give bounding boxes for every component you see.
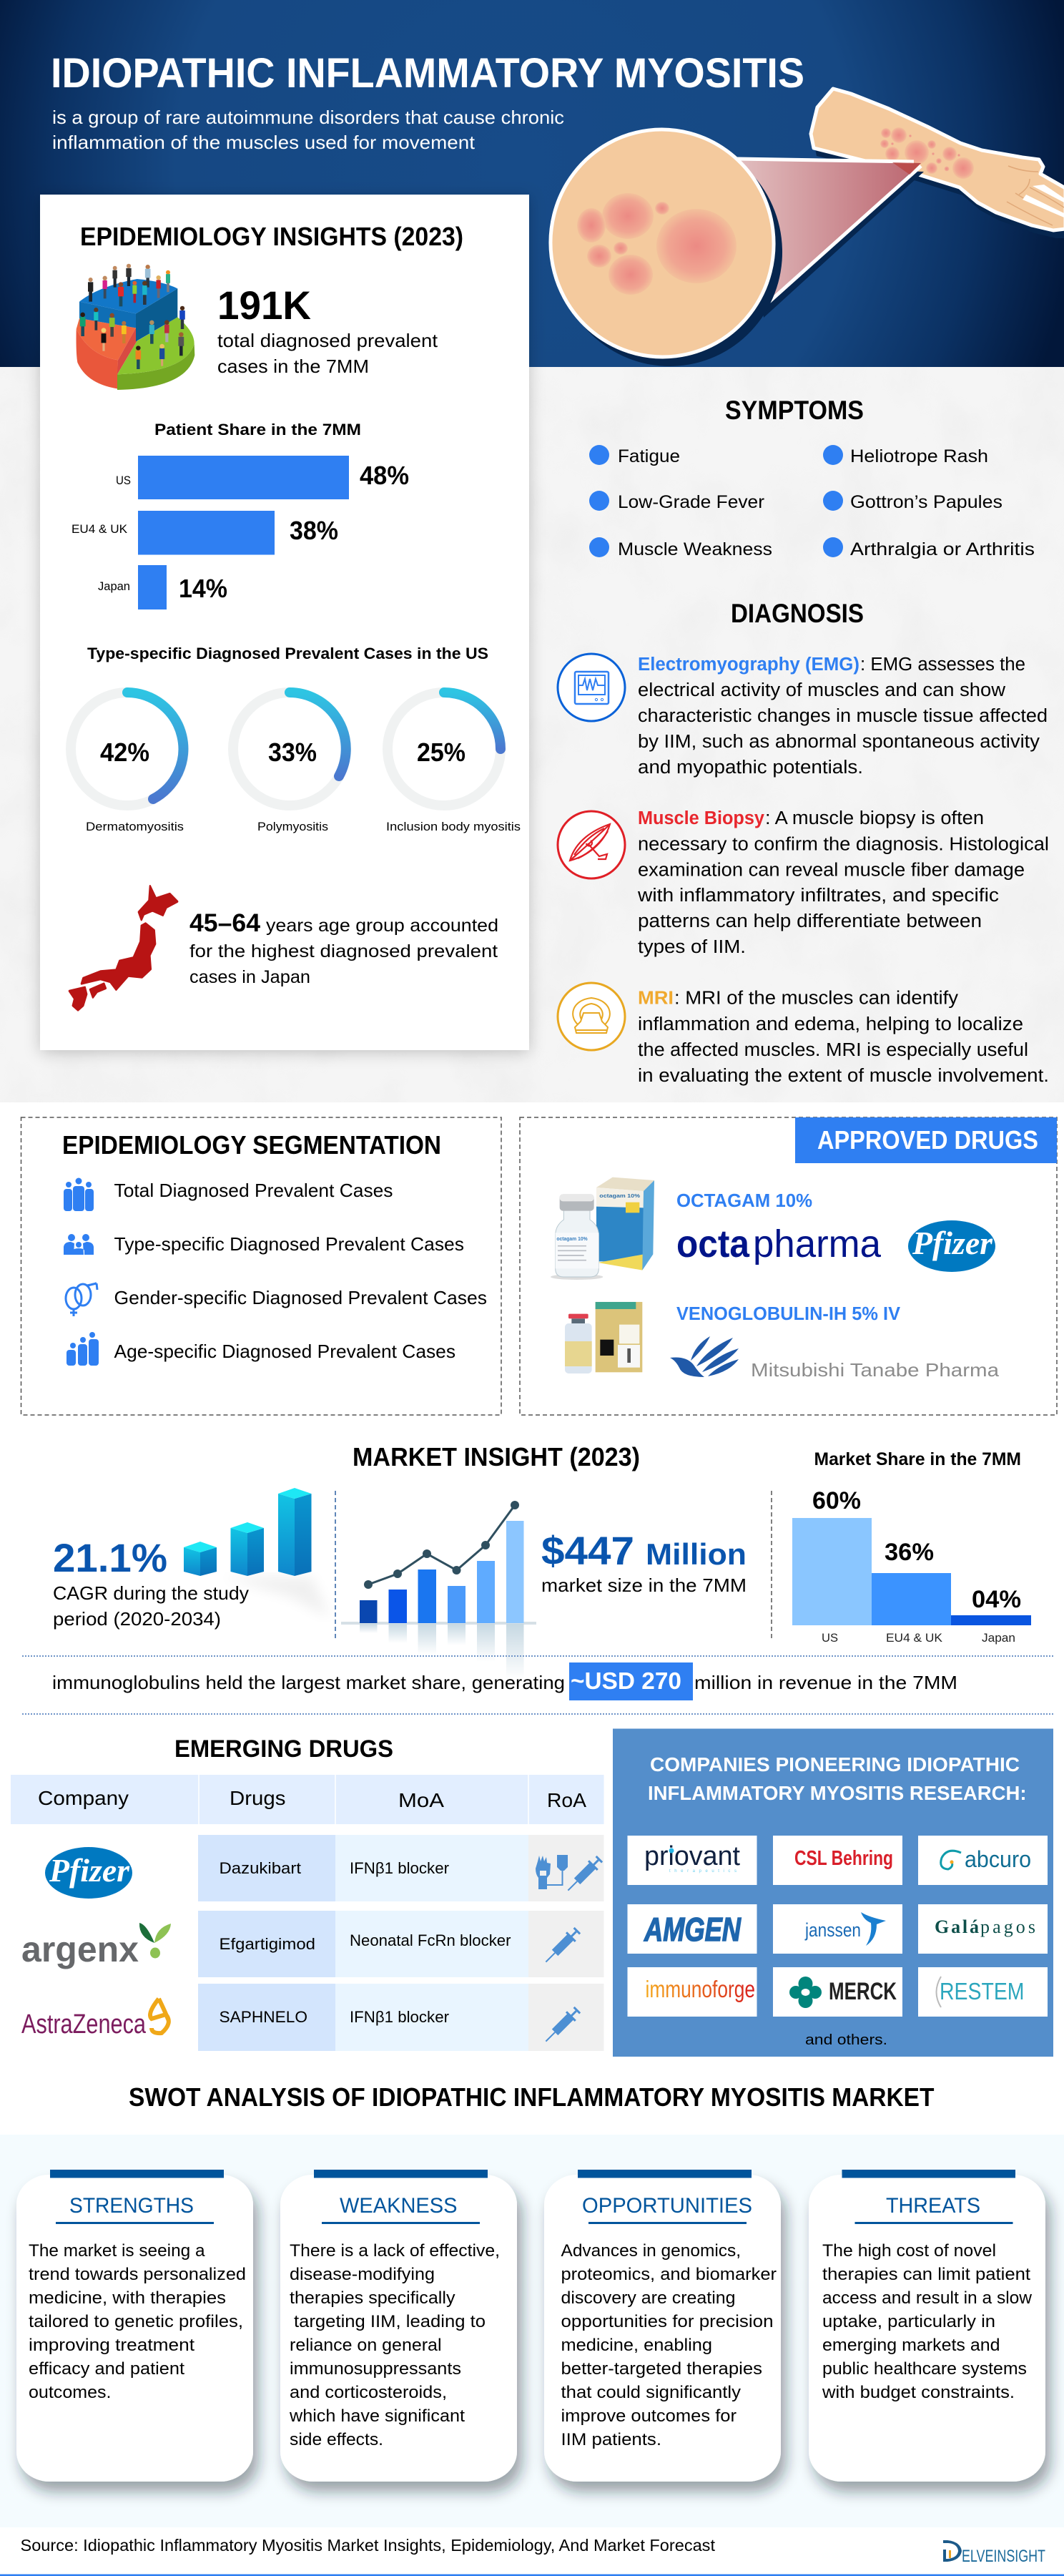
heading: diagnosis: DIAGNOSIS — [731, 599, 864, 628]
stat: market size — [541, 1528, 747, 1596]
symptom list: Fatigue — [618, 446, 680, 466]
row: astrazeneca saphnelo — [21, 1984, 604, 2051]
row: pfizer dazukibart: Dazukibart — [219, 1859, 301, 1877]
text: MRI — [638, 989, 1049, 1086]
text: EMG: characteristic changes in muscle tissue affected — [638, 706, 1048, 726]
logo: priovant: therapeutics — [669, 1869, 738, 1874]
image: venoglobulin vial and box — [565, 1302, 642, 1373]
text: EMG — [638, 655, 1048, 778]
chart: market share in the 7MM: 04% — [972, 1586, 1021, 1613]
text: age-specific cases: Age-specific Diagnosed Prevalent Cases — [114, 1341, 455, 1362]
text: EMG: Electromyography (EMG) — [638, 655, 859, 675]
card: opportunities — [544, 2170, 781, 2482]
logo: merck: MERCK — [829, 1978, 897, 2005]
panel: market CAGR — [53, 1488, 330, 1630]
text: weakness — [289, 2241, 500, 2449]
chart: market share in the 7MM: Japan — [982, 1631, 1015, 1645]
panel: symptoms — [589, 396, 1035, 559]
marble background — [0, 367, 1064, 1102]
donut chart: polymyositis — [233, 692, 346, 833]
logo: janssen: janssen — [804, 1919, 861, 1941]
text: opportunities: medicine, enabling — [561, 2336, 712, 2355]
icon: 3D growth columns — [184, 1488, 330, 1618]
row: pfizer dazukibart: IFNβ1 blocker — [350, 1859, 449, 1877]
row: argenx efgartigimod: Efgartigimod — [219, 1935, 315, 1953]
skin rash spots — [577, 193, 737, 295]
arm — [811, 89, 1064, 230]
text: strengths: improving treatment — [29, 2336, 194, 2355]
text: weakness: reliance on general — [290, 2336, 442, 2355]
logo: priovant: priovant — [644, 1841, 740, 1871]
stat: CAGR: 21.1% — [53, 1535, 167, 1580]
magnifying cone — [737, 159, 921, 315]
callout: japan age group: for the highest diagnosed prevalent — [189, 941, 498, 961]
bottom bar — [0, 2574, 1064, 2576]
row: argenx efgartigimod — [21, 1911, 604, 1977]
arm rash spots — [880, 127, 974, 179]
cone shadow — [744, 166, 924, 318]
table: emerging drugs — [11, 1773, 604, 2051]
chart: market share in the 7MM: 60% — [812, 1487, 861, 1514]
callout: immunoglobulins revenue: immunoglobulins held the largest market share, generating — [52, 1672, 565, 1693]
donut chart: inclusion body myositis: 25% — [417, 738, 466, 767]
icon: gender symbols — [66, 1283, 97, 1316]
text: threats — [822, 2241, 1033, 2402]
label: octagam: OCTAGAM 10% — [676, 1190, 812, 1211]
icon: total cases — [64, 1177, 94, 1211]
logo: pfizer — [908, 1220, 995, 1272]
heading: emerging drugs: EMERGING DRUGS — [174, 1735, 393, 1763]
icon: infusion drip — [536, 1855, 568, 1889]
subtitle: inflammation of the muscles used for movement — [52, 132, 476, 153]
row: pfizer dazukibart — [45, 1835, 604, 1901]
logo: abcuro: abcuro — [965, 1846, 1031, 1872]
icon: electromyography monitor — [558, 654, 625, 721]
heading: approved drugs — [795, 1117, 1057, 1163]
callout: japan age group — [189, 909, 498, 987]
SWOT background — [0, 2135, 1064, 2527]
chart: market size bars and trend line — [341, 1501, 536, 1679]
row: astrazeneca saphnelo: SAPHNELO — [219, 2008, 307, 2026]
logo: amgen: AMGEN — [644, 1911, 742, 1948]
callout: immunoglobulins revenue: ~USD 270 — [571, 1667, 681, 1694]
logo: galapagos: Galá — [935, 1916, 979, 1937]
heading: epidemiology segmentation: EPIDEMIOLOGY SEGMENTATION — [62, 1130, 441, 1160]
heading: patient share: Patient Share in the 7MM — [154, 421, 361, 439]
stat: CAGR: CAGR during the study — [53, 1582, 249, 1604]
text: threats: with budget constraints. — [822, 2383, 1015, 2402]
card: threats — [809, 2170, 1045, 2482]
text: opportunities: better-targeted therapies — [561, 2359, 762, 2379]
text: muscle biopsy: examination can reveal muscle fiber damage — [638, 860, 1025, 880]
text: threats: access and result in a slow — [822, 2288, 1033, 2308]
logo: restem: RESTEM — [940, 1978, 1024, 2004]
icon: muscle biopsy — [558, 811, 625, 878]
bullets — [589, 445, 843, 557]
text: muscle biopsy: Muscle Biopsy — [638, 808, 765, 828]
card: weakness: WEAKNESS — [340, 2194, 458, 2218]
text: gender-specific cases: Gender-specific Diagnosed Prevalent Cases — [114, 1287, 487, 1308]
text: weakness: disease-modifying — [290, 2265, 435, 2284]
stat: 191K: cases in the 7MM — [217, 356, 369, 377]
stat: market size: market size in the 7MM — [541, 1575, 747, 1596]
text: strengths: medicine, with therapies — [29, 2288, 226, 2308]
text: muscle biopsy: necessary to confirm the diagnosis. Histological — [638, 834, 1049, 854]
text: weakness: immunosuppressants — [290, 2359, 461, 2379]
header background — [0, 0, 1064, 368]
symptom list: Gottron’s Papules — [850, 492, 1003, 512]
label: venoglobulin: VENOGLOBULIN-IH 5% IV — [676, 1303, 901, 1324]
text: opportunities: discovery are creating — [561, 2288, 735, 2308]
row: argenx efgartigimod: argenx — [21, 1929, 139, 1969]
text: weakness: which have significant — [289, 2406, 465, 2426]
donut chart: dermatomyositis: Dermatomyositis — [86, 820, 184, 833]
panel: diagnosis — [558, 599, 1049, 1086]
table header: RoA — [547, 1789, 586, 1811]
card: threats: THREATS — [886, 2194, 980, 2218]
logo: janssen — [804, 1912, 886, 1946]
stat: CAGR: period (2020-2034) — [53, 1608, 221, 1630]
text: opportunities — [561, 2241, 777, 2449]
image: octagam vial and box: octagam 10% — [599, 1192, 641, 1199]
text: threats: public healthcare systems — [822, 2359, 1027, 2379]
bar chart: patient share: Japan — [98, 579, 130, 593]
text: strengths: efficacy and patient — [29, 2359, 184, 2379]
text: muscle biopsy — [637, 808, 1049, 957]
callout: immunoglobulins revenue: million in revenue in the 7MM — [694, 1672, 957, 1693]
heading: symptoms: SYMPTOMS — [725, 396, 864, 425]
icon: syringe — [541, 2005, 582, 2046]
icon: syringe — [563, 1854, 604, 1895]
subtitle — [52, 107, 564, 153]
text: weakness: side effects. — [290, 2430, 383, 2449]
text: threats: emerging markets and — [822, 2336, 1000, 2355]
table header: Company — [38, 1787, 129, 1809]
stat: CAGR — [53, 1535, 249, 1630]
donut chart: inclusion body myositis: Inclusion body myositis — [386, 820, 521, 833]
text: total cases: Total Diagnosed Prevalent Cases — [114, 1180, 393, 1201]
logo grid — [628, 1836, 1048, 2017]
stat: market size: Million — [646, 1537, 747, 1571]
heading: market insight: MARKET INSIGHT (2023) — [353, 1442, 640, 1471]
callout: japan age group: 45–64 — [189, 909, 261, 937]
panel: companies pioneering research — [613, 1728, 1053, 2057]
chart: market share in the 7MM: 36% — [885, 1539, 934, 1566]
stat: 191K — [217, 283, 438, 377]
illustration: arm with magnified skin rash — [538, 89, 1064, 379]
text: threats: The high cost of novel — [822, 2241, 996, 2261]
callout: japan age group: years age group accounted — [266, 916, 498, 936]
donut chart: dermatomyositis — [71, 692, 184, 833]
text: weakness: therapies specifically — [290, 2288, 455, 2308]
text: EMG: electrical activity of muscles and can show — [638, 680, 1006, 700]
icon: people on pie chart — [77, 264, 194, 390]
bar chart: patient share: 38% — [290, 516, 338, 545]
bar chart: patient share: 14% — [179, 574, 227, 603]
card: opportunities: OPPORTUNITIES — [582, 2194, 752, 2218]
stat: market size: $447 — [541, 1528, 634, 1573]
text: type-specific cases: Type-specific Diagnosed Prevalent Cases — [114, 1233, 464, 1255]
image: octagam vial and box — [551, 1177, 654, 1280]
callout: japan age group: cases in Japan — [189, 967, 310, 987]
text: MRI: in evaluating the extent of muscle involvement. — [638, 1066, 1049, 1086]
logo: CSL Behring: CSL Behring — [794, 1847, 893, 1870]
source line: Source: Idiopathic Inflammatory Myositis Market Insights, Epidemiology, And Market Forecast — [20, 2536, 716, 2555]
text: EMG: and myopathic potentials. — [638, 758, 863, 778]
stat: 191K: total diagnosed prevalent — [217, 330, 438, 351]
text: strengths: trend towards personalized — [29, 2265, 246, 2284]
logo: octapharma — [676, 1223, 882, 1265]
logo: mitsubishi tanabe pharma — [670, 1336, 1000, 1381]
text: strengths: tailored to genetic profiles, — [29, 2312, 243, 2331]
bar chart: patient share: 48% — [360, 461, 409, 490]
logo: galapagos: pagos — [980, 1916, 1035, 1937]
text: threats: therapies can limit patient — [822, 2265, 1030, 2284]
icon: type-specific cases — [64, 1234, 94, 1255]
heading: approved drugs: APPROVED DRUGS — [817, 1125, 1038, 1155]
text: weakness: There is a lack of effective, — [290, 2241, 500, 2261]
panel: approved drugs — [520, 1117, 1057, 1415]
card: strengths: STRENGTHS — [69, 2194, 194, 2218]
logo: pfizer: Pfizer — [912, 1225, 993, 1261]
heading: companies: COMPANIES PIONEERING IDIOPATHIC — [650, 1753, 1020, 1776]
logo: immunoforge: immunoforge — [645, 1976, 755, 2002]
row: pfizer dazukibart: Pfizer — [49, 1852, 130, 1889]
logo: merck — [789, 1977, 897, 2008]
text: MRI: : MRI of the muscles can identify — [674, 989, 958, 1009]
text: MRI: inflammation and edema, helping to localize — [638, 1014, 1023, 1034]
arm shadow — [814, 97, 1064, 238]
symptom list: Low-Grade Fever — [618, 492, 764, 512]
text: EMG: by IIM, such as abnormal spontaneous activity — [638, 732, 1040, 752]
logo: octapharma: pharma — [753, 1223, 882, 1265]
text: threats: uptake, particularly in — [822, 2312, 995, 2331]
text: opportunities: improve outcomes for — [561, 2406, 737, 2426]
table header: MoA — [398, 1789, 444, 1811]
panel: epidemiology insights — [40, 195, 529, 1050]
text: weakness: and corticosteroids, — [290, 2383, 447, 2402]
row: astrazeneca saphnelo: IFNβ1 blocker — [350, 2008, 449, 2026]
icon: syringe — [541, 1926, 582, 1967]
callout: immunoglobulins revenue — [52, 1662, 957, 1700]
donut chart: polymyositis: Polymyositis — [257, 820, 328, 833]
text: strengths — [29, 2241, 246, 2402]
text: MRI: MRI — [638, 989, 674, 1009]
heading: companies — [648, 1753, 1027, 1804]
magnified skin circle shadow — [543, 124, 795, 379]
symptom list: Muscle Weakness — [618, 539, 772, 559]
table header: Drugs — [230, 1787, 286, 1809]
text: muscle biopsy: : A muscle biopsy is often — [765, 808, 984, 828]
icon: japan map — [69, 886, 177, 1010]
chart: market share in the 7MM — [792, 1449, 1031, 1645]
title: IDIOPATHIC INFLAMMATORY MYOSITIS — [51, 50, 804, 97]
heading: epidemiology insights: EPIDEMIOLOGY INSIGHTS (2023) — [80, 222, 463, 251]
donut chart: dermatomyositis: 42% — [100, 738, 149, 767]
text: MRI: the affected muscles. MRI is especially useful — [638, 1040, 1028, 1060]
card: weakness — [280, 2170, 517, 2482]
symptom list — [618, 446, 1035, 559]
text: opportunities: Advances in genomics, — [561, 2241, 741, 2261]
donut chart: polymyositis: 33% — [268, 738, 317, 767]
chart: market share in the 7MM: EU4 & UK — [886, 1631, 943, 1645]
text: muscle biopsy: patterns can help differentiate between — [638, 911, 982, 931]
row: astrazeneca saphnelo: AstraZeneca — [21, 2009, 147, 2039]
logo: octapharma: octa — [676, 1223, 750, 1265]
text: opportunities: proteomics, and biomarker — [561, 2265, 777, 2284]
text: opportunities: opportunities for precision — [561, 2312, 774, 2331]
text: opportunities: that could significantly — [561, 2383, 741, 2402]
text: EMG: : EMG assesses the — [860, 655, 1025, 675]
table header — [11, 1773, 604, 1824]
magnified skin circle — [538, 117, 787, 370]
symptom list: Heliotrope Rash — [850, 446, 988, 466]
image: octagam vial and box: octagam 10% — [556, 1235, 588, 1242]
panel: epidemiology segmentation — [21, 1117, 501, 1415]
tile backgrounds — [628, 1836, 1048, 2017]
bar chart: patient share: EU4 & UK — [72, 522, 128, 536]
symptom list: Arthralgia or Arthritis — [850, 539, 1035, 559]
text: strengths: The market is seeing a — [29, 2241, 205, 2261]
text: muscle biopsy: with inflammatory infiltrates, and specific — [637, 886, 999, 906]
heading: SWOT analysis: SWOT ANALYSIS OF IDIOPATHIC INFLAMMATORY MYOSITIS MARKET — [129, 2082, 934, 2112]
donut chart: inclusion body myositis — [386, 692, 521, 833]
text: strengths: outcomes. — [29, 2383, 112, 2402]
text: opportunities: IIM patients. — [561, 2430, 661, 2449]
heading: companies: INFLAMMATORY MYOSITIS RESEARCH: — [648, 1782, 1027, 1804]
bar chart: patient share: US — [116, 474, 131, 487]
text: muscle biopsy: types of IIM. — [638, 937, 746, 957]
text: weakness: targeting IIM, leading to — [294, 2312, 486, 2331]
heading: type-specific cases: Type-specific Diagnosed Prevalent Cases in the US — [87, 645, 488, 662]
logo: galapagos — [935, 1916, 1035, 1937]
logo: mitsubishi tanabe pharma: Mitsubishi Tanabe Pharma — [751, 1359, 1000, 1381]
heading: market share: Market Share in the 7MM — [814, 1449, 1021, 1469]
icon: MRI scanner — [558, 983, 625, 1050]
chart: market share in the 7MM: US — [822, 1631, 838, 1645]
bar chart: patient share — [72, 456, 409, 609]
card: strengths — [16, 2170, 253, 2482]
stat: 191K: 191K — [217, 283, 311, 328]
logo: DelveInsight — [943, 2540, 1045, 2566]
row: argenx efgartigimod: Neonatal FcRn blocker — [350, 1931, 511, 1949]
subtitle: is a group of rare autoimmune disorders that cause chronic — [52, 107, 564, 128]
text: and others: and others. — [805, 2032, 887, 2048]
icon: age groups — [66, 1332, 99, 1366]
